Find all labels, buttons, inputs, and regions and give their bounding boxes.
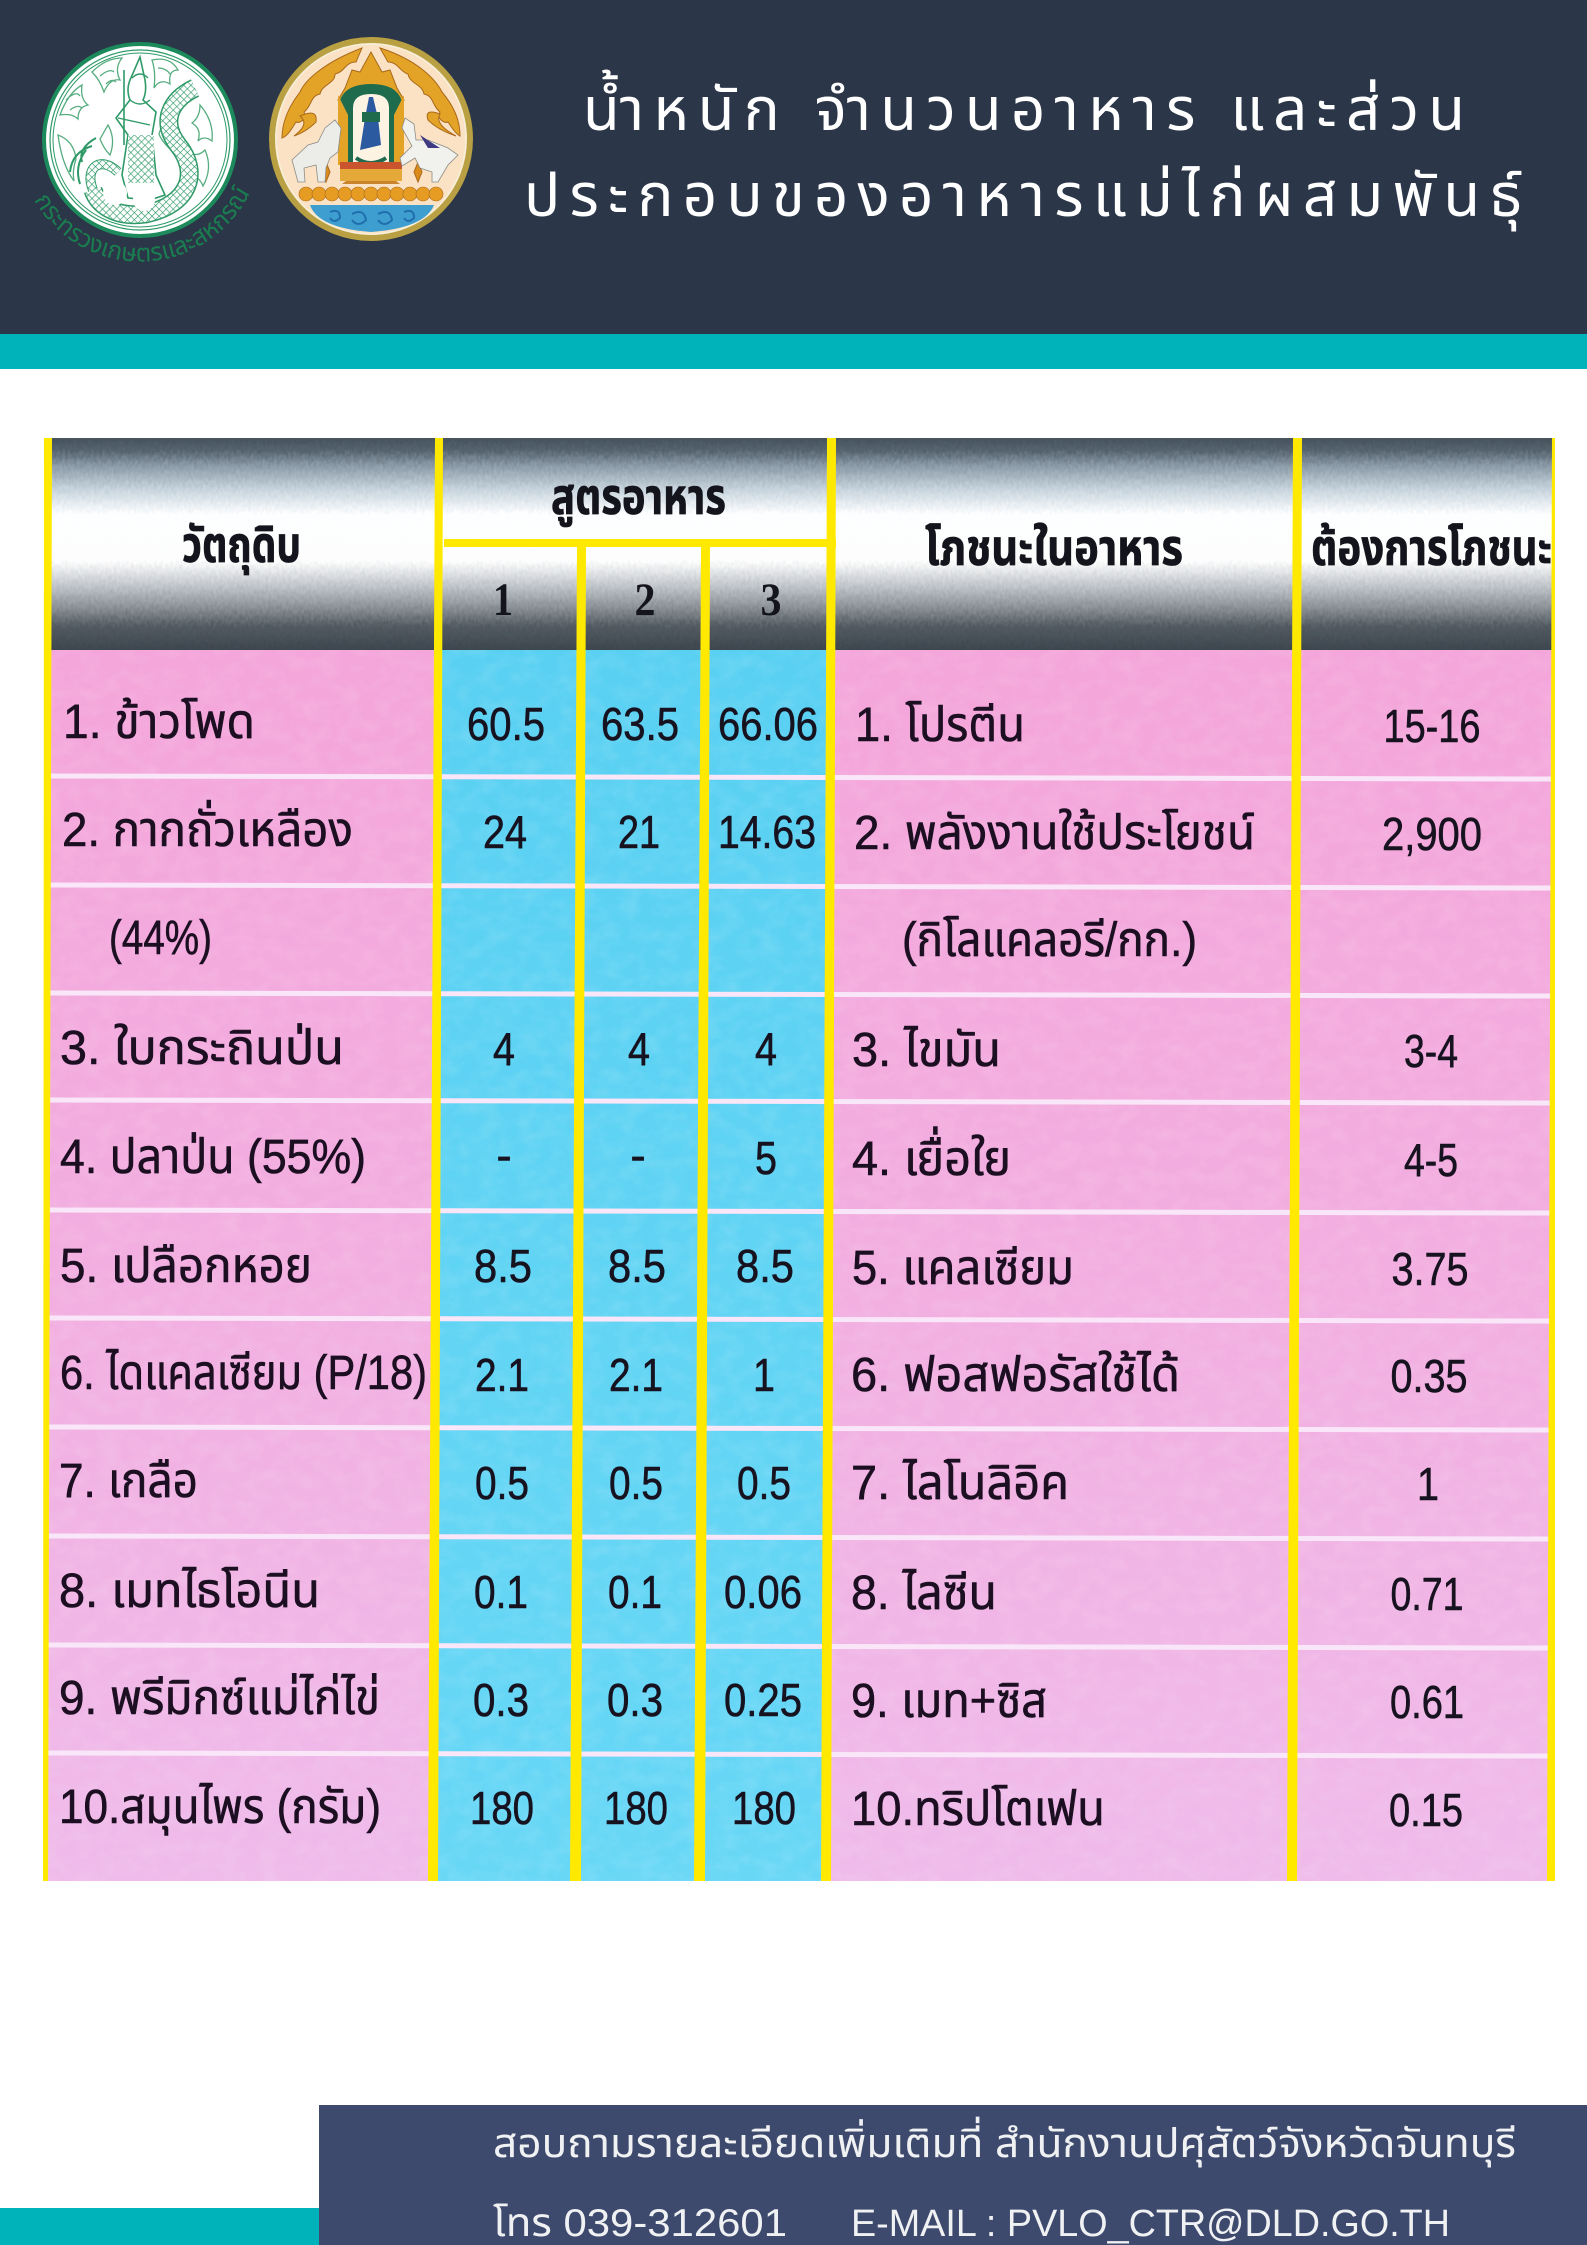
raw material names: 5. เปลือกหอย — [60, 1240, 312, 1293]
raw material names: 9. พรีมิกซ์แม่ไก่ไข่ — [59, 1672, 380, 1725]
nutrient names: 7. ไลโนลิอิค — [851, 1457, 1069, 1510]
nutrient requirement values: 0.15 — [1389, 1784, 1463, 1836]
nutrient requirement values: 0.71 — [1390, 1568, 1464, 1620]
column headers — [182, 469, 1552, 626]
formula values: 180 — [732, 1782, 796, 1834]
formula values: 14.63 — [718, 806, 816, 858]
nutrient requirement values — [1382, 700, 1482, 1836]
formula values: 4 — [493, 1023, 515, 1075]
formula values: - — [630, 1129, 646, 1181]
header: feed formula: สูตรอาหาร — [551, 469, 726, 527]
footer contact panel — [319, 2105, 1587, 2245]
formula values: 4 — [628, 1023, 650, 1075]
formula values: 4 — [755, 1023, 777, 1075]
raw material names: (44%) — [109, 912, 212, 965]
formula values: 21 — [618, 806, 660, 858]
formula values: 0.5 — [737, 1457, 791, 1509]
formula values: 0.1 — [608, 1566, 662, 1618]
nutrient requirement values: 2,900 — [1382, 808, 1482, 860]
raw material names: 1. ข้าวโพด — [63, 696, 255, 749]
email: E-MAIL : PVLO_CTR@DLD.GO.TH — [851, 2203, 1450, 2245]
formula values: 8.5 — [736, 1240, 794, 1292]
formula values: 180 — [470, 1782, 534, 1834]
formula values: 24 — [483, 806, 527, 858]
formula values: - — [496, 1129, 512, 1181]
header: formula numbers — [493, 574, 782, 626]
header: formula numbers: 2 — [634, 574, 656, 626]
nutrient names: 9. เมท+ซิส — [851, 1675, 1047, 1728]
formula values: 0.5 — [609, 1457, 663, 1509]
formula values: 5 — [755, 1132, 777, 1184]
formula values: 60.5 — [467, 698, 545, 750]
nutrient requirement values: 0.35 — [1390, 1350, 1468, 1402]
nutrient names — [851, 699, 1255, 1836]
formula values: 66.06 — [718, 698, 818, 750]
formula values: 2.1 — [609, 1349, 663, 1401]
formula values: 0.5 — [475, 1457, 529, 1509]
formula values: 0.25 — [724, 1674, 802, 1726]
nutrient names: 1. โปรตีน — [855, 699, 1025, 752]
nutrient names: 2. พลังงานใช้ประโยชน์ — [854, 807, 1255, 860]
nutrient names: (กิโลแคลอรี/กก.) — [902, 914, 1197, 967]
logo: Department of Livestock seal — [272, 40, 470, 238]
table header background — [51, 438, 1552, 650]
nutrient names: 4. เยื่อใย — [852, 1126, 1011, 1186]
teal stripe under header — [0, 334, 1587, 369]
nutrient requirement values: 3-4 — [1404, 1025, 1458, 1077]
logo: Ministry of Agriculture seal — [34, 42, 250, 262]
title — [524, 69, 1522, 232]
nutrient requirement values: 3.75 — [1392, 1243, 1468, 1295]
nutrient requirement values: 4-5 — [1404, 1134, 1458, 1186]
formula values: 8.5 — [474, 1240, 532, 1292]
formula values: 8.5 — [608, 1240, 666, 1292]
raw material names — [59, 696, 427, 1836]
nutrient requirement values: 0.61 — [1390, 1676, 1464, 1728]
phone: โทร 039-312601 — [493, 2202, 787, 2245]
formula values: 2.1 — [475, 1349, 529, 1401]
nutrition table — [24, 420, 1575, 1881]
nutrient names: 3. ไขมัน — [852, 1024, 1001, 1077]
nutrient requirement values: 15-16 — [1384, 700, 1480, 752]
raw material names: 6. ไดแคลเซียม (P/18) — [60, 1347, 427, 1400]
header: nutrients in feed: โภชนะในอาหาร — [925, 520, 1183, 576]
footer teal strip — [0, 2208, 319, 2245]
formula values: 0.3 — [473, 1674, 529, 1726]
raw material names: 8. เมทไธโอนีน — [59, 1565, 320, 1618]
header: raw materials: วัตถุดิบ — [182, 517, 301, 575]
raw material names: 10.สมุนไพร (กรัม) — [59, 1781, 381, 1836]
raw material names: 2. กากถั่วเหลือง — [62, 800, 353, 857]
nutrient names: 8. ไลซีน — [851, 1567, 997, 1620]
formula values: 1 — [753, 1349, 775, 1401]
formula values: 180 — [604, 1782, 668, 1834]
nutrient names: 10.ทริปโตเฟน — [851, 1783, 1105, 1836]
header: formula numbers: 1 — [493, 574, 513, 626]
title line 2: ประกอบของอาหารแม่ไก่ผสมพันธุ์ — [524, 162, 1522, 232]
nutrient names: 5. แคลเซียม — [852, 1242, 1074, 1295]
formula values: 0.3 — [607, 1674, 663, 1726]
formula values: 0.1 — [474, 1566, 528, 1618]
raw material names: 4. ปลาป่น (55%) — [60, 1131, 366, 1184]
header: formula numbers: 3 — [760, 574, 782, 626]
formula values: 0.06 — [724, 1566, 802, 1618]
title line 1: น้ำหนัก จำนวนอาหาร และส่วน — [583, 69, 1465, 143]
formula columns blue — [434, 650, 832, 1881]
nutrient names: 6. ฟอสฟอรัสใช้ได้ — [851, 1349, 1180, 1402]
raw material names: 7. เกลือ — [59, 1455, 198, 1508]
contact line 1: สอบถามรายละเอียดเพิ่มเติมที่ สำนักงานปศุสัตว์จังหวัดจันทบุรี — [493, 2116, 1516, 2167]
formula values — [467, 698, 818, 1834]
formula values: 63.5 — [601, 698, 679, 750]
nutrient requirement values: 1 — [1417, 1458, 1439, 1510]
seal caption: กระทรวงเกษตรและสหกรณ์ — [34, 184, 250, 262]
header band — [0, 0, 1587, 334]
raw material names: 3. ใบกระถินป่น — [60, 1022, 344, 1075]
table body pink — [44, 650, 1555, 1881]
